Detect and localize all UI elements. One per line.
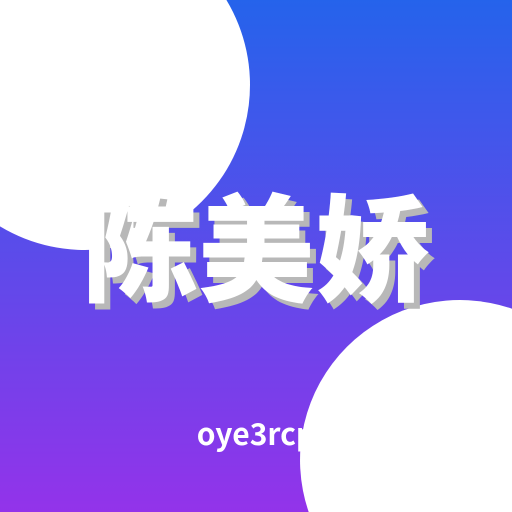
subtitle text: oye3rcp [197, 410, 315, 454]
title: 陈美娇 [82, 158, 430, 326]
